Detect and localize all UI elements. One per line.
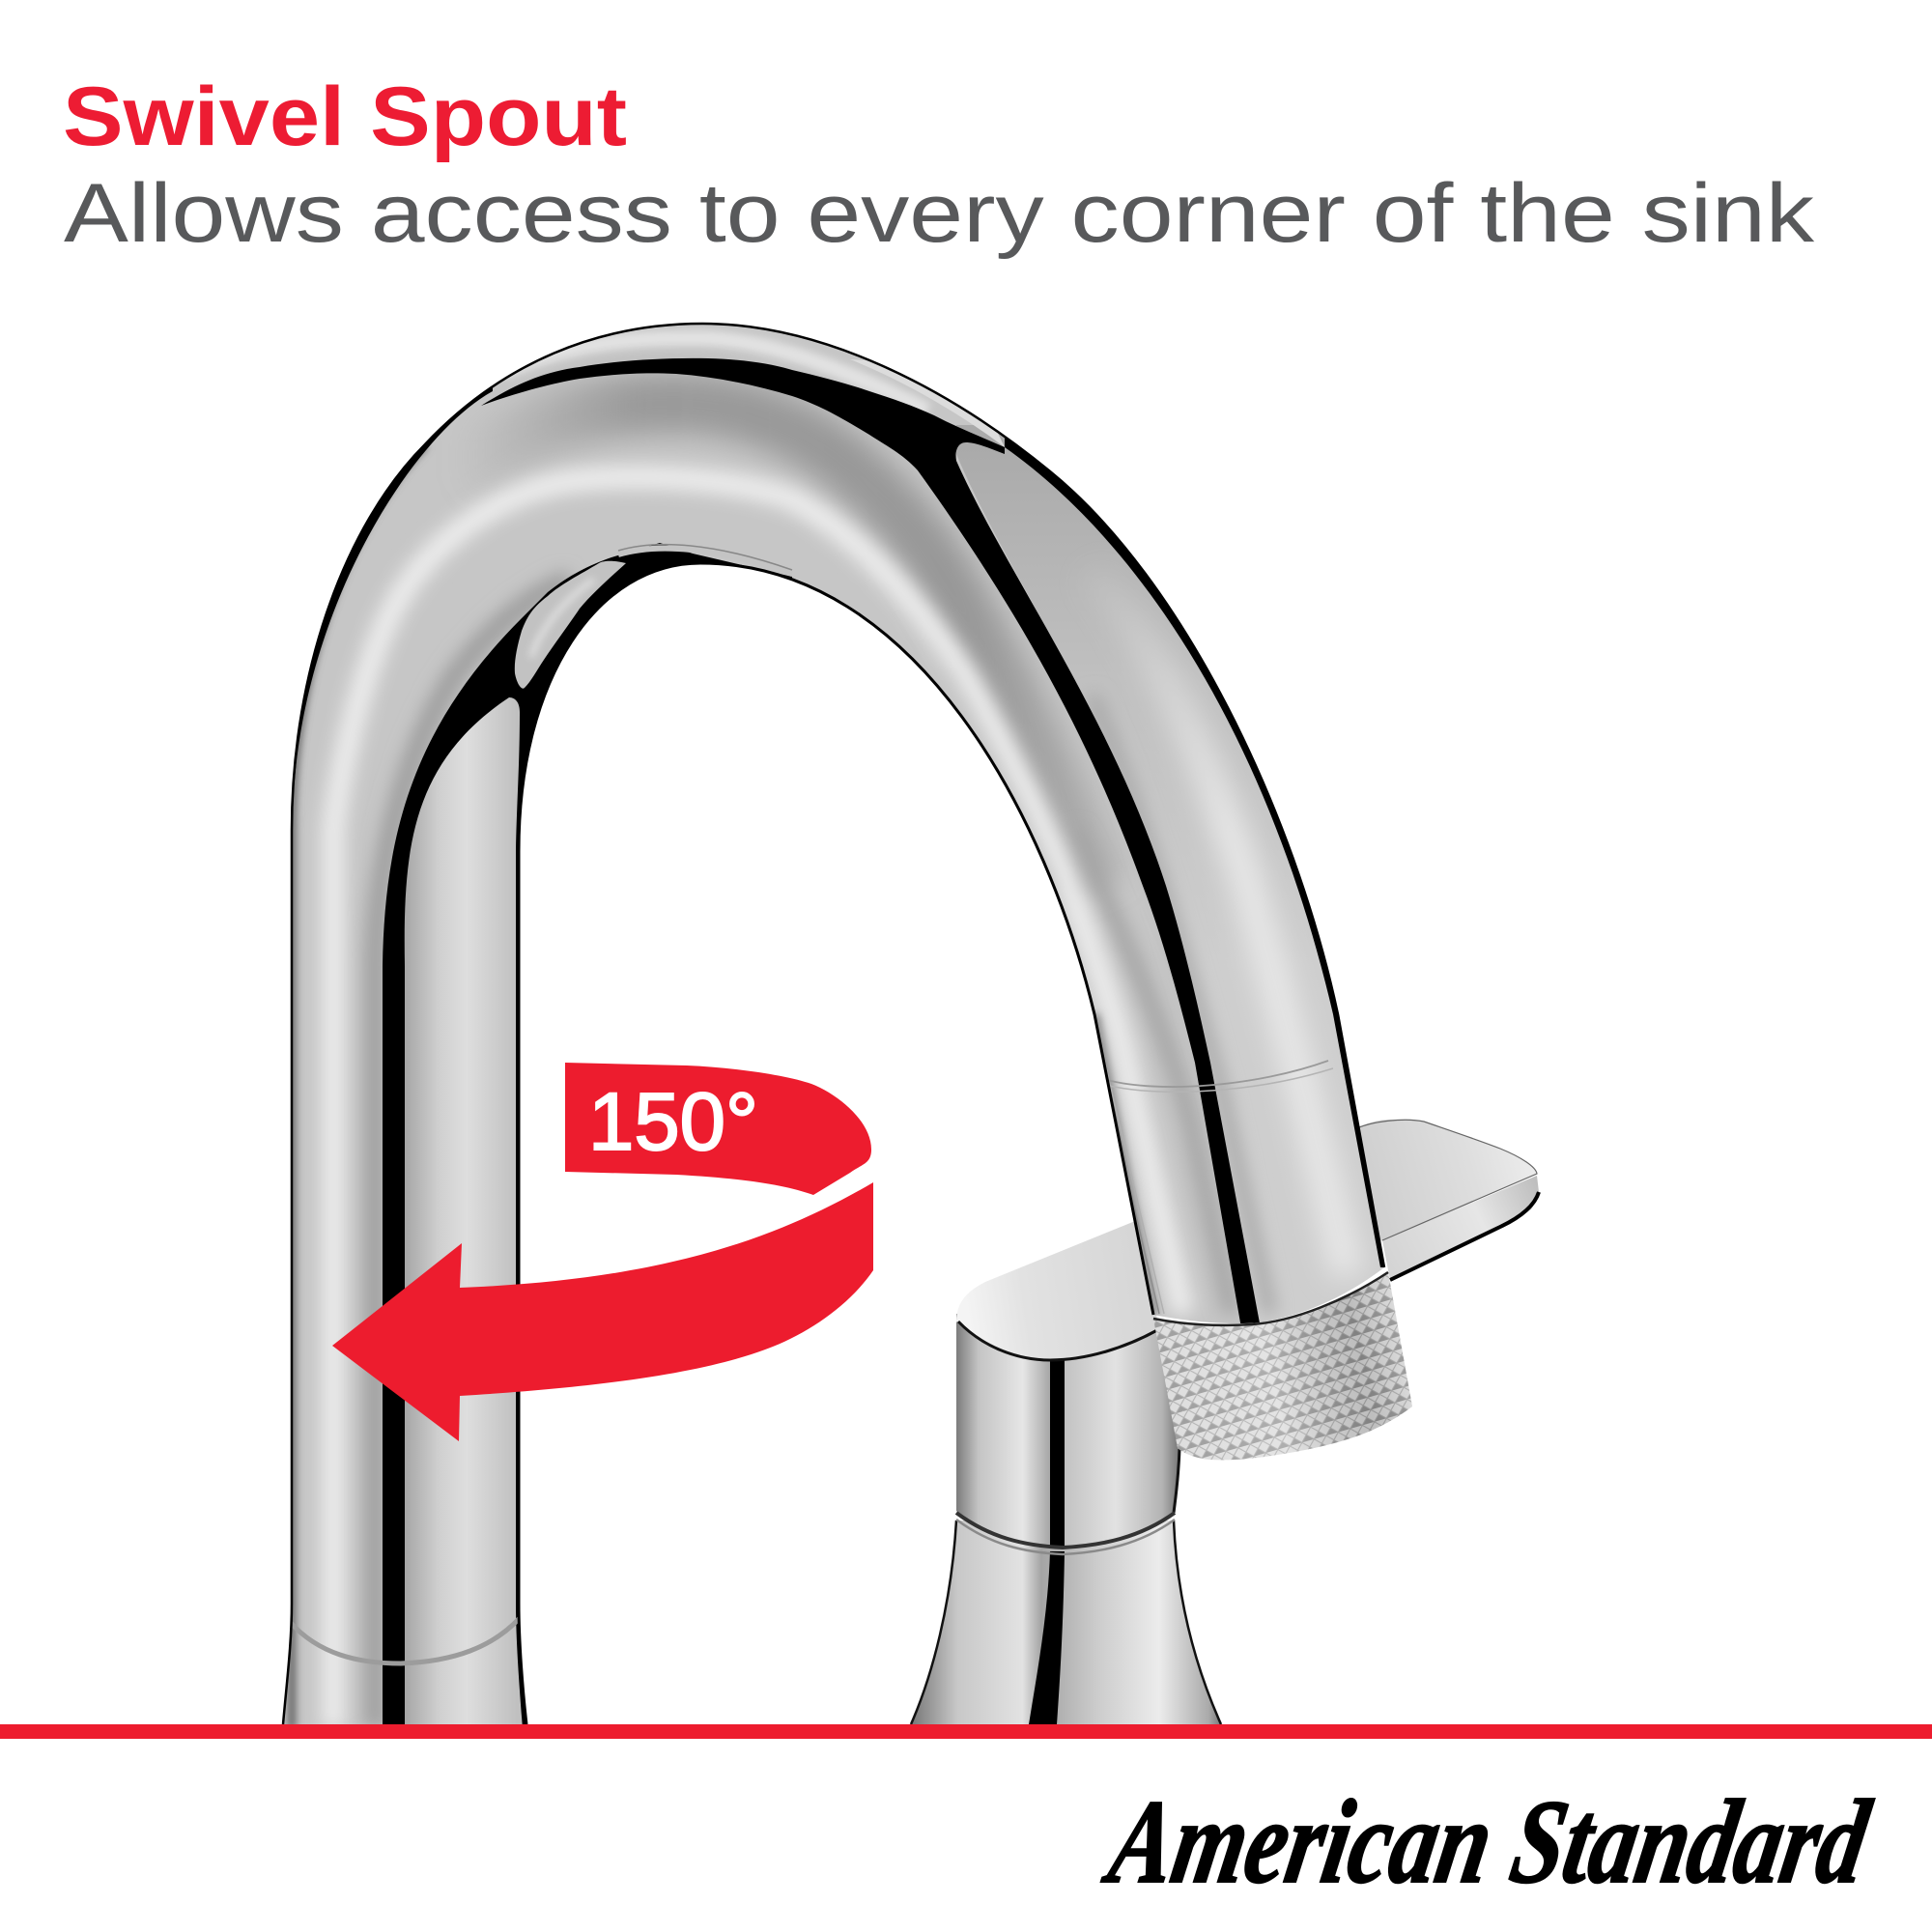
faucet handle: [911, 1120, 1539, 1724]
base stripe: [1029, 1551, 1065, 1724]
inner rim lines: [618, 549, 792, 574]
cylinder right edge: [1174, 1449, 1179, 1513]
ring groove: [956, 1513, 1175, 1548]
inner black crescent and column stripe: [383, 543, 792, 1729]
inner spout edge shade: [1094, 1014, 1153, 1315]
inner reflection blob: [515, 561, 626, 689]
blob highlight: [531, 580, 594, 657]
shade beside crescent: [375, 580, 570, 1729]
handle base flare: [911, 1520, 1221, 1724]
upper crescent highlight: [502, 338, 927, 411]
column ring: [291, 1618, 520, 1663]
base outline: [911, 1520, 1221, 1724]
light streak along tube: [333, 477, 1183, 1729]
faucet illustration: [242, 290, 1539, 1739]
right panel highlight: [1092, 570, 1348, 1275]
lower spout shade: [1091, 873, 1238, 1318]
heading: Swivel Spout: Swivel Spout: [63, 71, 627, 163]
lever front lower edge: [1390, 1192, 1539, 1280]
chrome spout tube: [284, 325, 1384, 1724]
ribbon top band: [565, 1063, 871, 1195]
lever top outline: [1352, 1120, 1537, 1240]
lever front face: [1382, 1176, 1539, 1280]
rotation arrow: [332, 1063, 873, 1441]
lever rim shadow: [958, 1321, 1157, 1360]
knurled aerator: [1153, 1272, 1412, 1460]
right panel base: [956, 425, 1384, 1321]
handle cylinder: [956, 1314, 1179, 1547]
spout outline: [283, 324, 1384, 1724]
black band and stripe: [481, 358, 1261, 1328]
inner outline: [519, 563, 1153, 1724]
right column panel: [405, 697, 523, 1729]
ribbon lower band with arrow head: [332, 1182, 873, 1441]
label: 150 degrees: 150°: [588, 1076, 758, 1167]
right outer black edge: [1005, 439, 1383, 1267]
upper crescent over panel: [850, 359, 1005, 447]
shade beside stripe: [1092, 696, 1270, 1314]
left outer black edge: [294, 388, 493, 785]
lever top face left: [956, 1219, 1159, 1360]
red baseline rule: [0, 1724, 1932, 1739]
left edge shade: [292, 444, 425, 1729]
arch grey shade: [454, 404, 1096, 889]
subheading: Allows access to every corner of the sink: [64, 167, 1815, 260]
lever top face right: [1352, 1120, 1537, 1256]
spout joint lines: [1107, 1061, 1328, 1087]
cylinder stripe: [1050, 1357, 1065, 1548]
